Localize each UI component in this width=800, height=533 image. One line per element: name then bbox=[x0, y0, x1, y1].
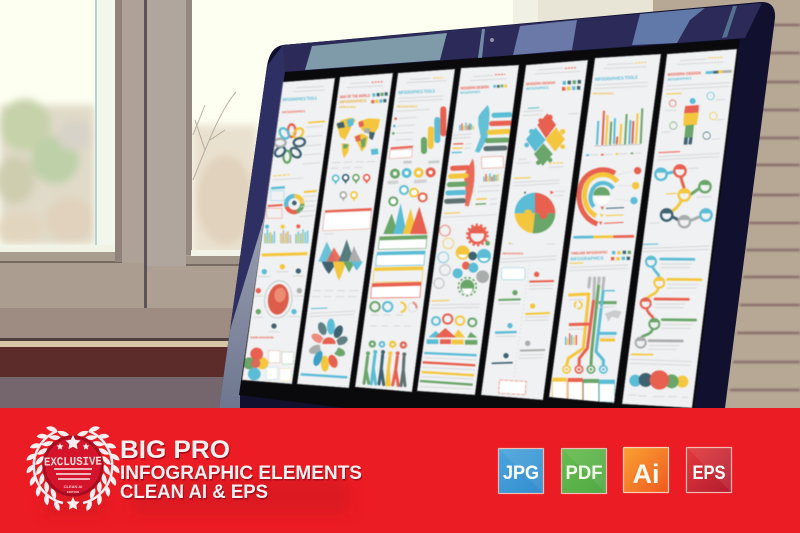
chart: puzzle gears bbox=[524, 113, 565, 166]
panel 4: modern design bbox=[417, 65, 519, 395]
chart: vertical bars bbox=[597, 108, 642, 145]
rings bbox=[563, 366, 607, 373]
badge inner circle bbox=[44, 437, 102, 495]
heading: MODERN DESIGN bbox=[526, 81, 556, 86]
heading: MODERN DESIGN bbox=[460, 84, 489, 91]
heading: TIMELINE INFOGRAPHIC bbox=[571, 250, 608, 256]
heading: MAP OF THE WORLD bbox=[340, 93, 370, 99]
monitor bezel bbox=[219, 2, 775, 408]
triangles row bbox=[428, 331, 443, 337]
background: room with window bbox=[0, 0, 800, 408]
red footer band bbox=[0, 408, 800, 533]
small charts bbox=[575, 301, 582, 309]
black screen bbox=[239, 39, 740, 408]
panel 7: modern design molecule: INFOGRAPHICS bbox=[667, 76, 692, 82]
chart: world map bbox=[336, 118, 380, 158]
rings row bbox=[432, 317, 440, 325]
panel 6: bar chart and timeline: INFOGRAPHICS bbox=[593, 92, 614, 96]
red box bbox=[325, 209, 372, 212]
panel 2: world map: WORLD MAP bbox=[339, 105, 356, 109]
panel 5: modern design puzzle: INFOGRAPHICS bbox=[526, 86, 549, 91]
title line 2: INFOGRAPHIC ELEMENTS bbox=[120, 462, 362, 484]
dots above chart bbox=[265, 225, 269, 229]
chart: pin mountains bbox=[383, 213, 398, 234]
title text block: CLEAN AI & EPS bbox=[121, 482, 269, 504]
icon: JPG format bbox=[498, 448, 544, 494]
chart: ring flower bbox=[273, 124, 306, 163]
far wall behind monitor bbox=[513, 0, 538, 30]
tricolor band bbox=[573, 233, 593, 241]
boxes bbox=[553, 379, 615, 402]
divider text bbox=[659, 150, 680, 154]
horizontal bars bbox=[424, 353, 477, 355]
icon: cyan person with labels bbox=[475, 105, 489, 153]
panel 5: modern design puzzle bbox=[481, 60, 588, 400]
icon: PDF format bbox=[562, 448, 606, 494]
top reflection 1 bbox=[305, 33, 447, 70]
red outlined box bbox=[499, 380, 526, 395]
icon: EPS format: EPS bbox=[692, 463, 726, 484]
laurel wreath bbox=[26, 424, 120, 511]
icon: person figure bbox=[690, 98, 696, 104]
icon: Ai format: Ai bbox=[632, 459, 660, 489]
icon: people silhouettes bbox=[364, 355, 405, 386]
top reflection 2 bbox=[513, 20, 577, 55]
top bezel band bbox=[283, 3, 762, 72]
chart: circular puzzle bbox=[515, 193, 535, 213]
branches bbox=[193, 92, 236, 180]
footer soft shadow bbox=[45, 478, 350, 515]
icon: EPS format bbox=[686, 448, 732, 492]
dots bbox=[369, 340, 376, 348]
window sill bbox=[0, 308, 240, 338]
brick wall bbox=[653, 0, 800, 408]
chart: 3D bars bbox=[424, 109, 443, 151]
yellow rule bbox=[631, 352, 653, 357]
cyan bar bbox=[301, 374, 347, 377]
chart: venn diagram bbox=[243, 357, 255, 369]
badge: exclusive laurel emblem: EDITION bbox=[67, 490, 79, 494]
swatches bbox=[372, 93, 375, 97]
panel 4: modern design: INFOGRAPHICS bbox=[460, 90, 481, 95]
chart: timeline tree bbox=[567, 277, 617, 365]
chart legend bbox=[586, 152, 589, 158]
panel 1: infographics tools: INFOGRAPHICS bbox=[282, 109, 305, 114]
panel 3: infographics tools bbox=[355, 69, 455, 392]
panel 1: infographics tools bbox=[242, 78, 335, 384]
chart: donut bbox=[286, 196, 302, 212]
timeline labels bbox=[661, 255, 694, 263]
badge stripes bbox=[54, 469, 92, 479]
pins bbox=[333, 175, 370, 198]
window frame bbox=[95, 0, 97, 250]
panel 1: infographics tools: VENN DIAGRAM bbox=[250, 336, 274, 340]
panel 2: world map: INFOGRAPHICS bbox=[339, 98, 367, 104]
chart: gears and rings bbox=[434, 225, 454, 288]
left bezel navy bbox=[230, 41, 330, 395]
panel 7: modern design molecule bbox=[622, 49, 737, 408]
chart: molecule bbox=[667, 172, 700, 221]
title line 1: BIG PRO bbox=[120, 436, 230, 464]
circles and labels bbox=[634, 167, 641, 174]
panel 3: infographics tools: INFOGRAPHICS bbox=[397, 104, 418, 108]
color strip bbox=[706, 68, 713, 77]
chart: vertical timeline bbox=[642, 267, 659, 337]
trees outside left window bbox=[0, 99, 95, 245]
title text block: BIG PRO bbox=[121, 438, 231, 466]
stars bbox=[57, 435, 89, 510]
chart: bar groups bbox=[265, 229, 308, 243]
title line 3: CLEAN AI & EPS bbox=[120, 481, 268, 503]
circles row bbox=[390, 169, 400, 179]
panel 6: bar chart and timeline: INFOGRAPHICS bbox=[570, 256, 604, 262]
top reflection 3 bbox=[632, 8, 705, 45]
icon: red person with labels bbox=[464, 158, 474, 207]
heading: INFOGRAPHICS TOOLS bbox=[595, 75, 638, 82]
icon: PDF format: PDF bbox=[566, 462, 603, 484]
panel 2: world map bbox=[297, 73, 393, 388]
panel 6: bar chart and timeline bbox=[549, 54, 661, 403]
badge: exclusive laurel emblem bbox=[26, 424, 120, 511]
ring gauges bbox=[370, 302, 380, 311]
panel 5: modern design puzzle: INFOGRAPHICS bbox=[503, 252, 523, 256]
camera dot bbox=[490, 38, 494, 42]
trees outside right window bbox=[192, 125, 257, 255]
title text block bbox=[120, 436, 363, 504]
heading: INFOGRAPHICS TOOLS bbox=[282, 96, 317, 102]
yellow bar bbox=[262, 254, 307, 255]
chart: central globe bbox=[264, 280, 293, 319]
stacked text boxes bbox=[379, 237, 427, 238]
lower left bezel reflection bbox=[219, 205, 268, 408]
badge banner: EXCLUSIVE bbox=[44, 454, 102, 470]
chart: wave mountains bbox=[318, 242, 337, 262]
heading: MODERN DESIGN bbox=[667, 70, 701, 77]
monitor bbox=[219, 2, 775, 408]
chart: small bars bbox=[460, 123, 473, 131]
chart: overlapping circles bbox=[629, 375, 641, 387]
icon: JPG format: JPG bbox=[503, 462, 539, 484]
timeline items bbox=[502, 268, 525, 280]
badge small text: CLEAN AI bbox=[64, 484, 82, 489]
heading: INFOGRAPHICS TOOLS bbox=[398, 88, 435, 95]
ring icons bbox=[669, 92, 717, 139]
chart: radial rainbow bbox=[579, 170, 617, 224]
chart: petal flower bbox=[308, 319, 349, 372]
title text block: INFOGRAPHIC ELEMENTS bbox=[121, 464, 363, 486]
icon: Ai format bbox=[624, 448, 668, 492]
